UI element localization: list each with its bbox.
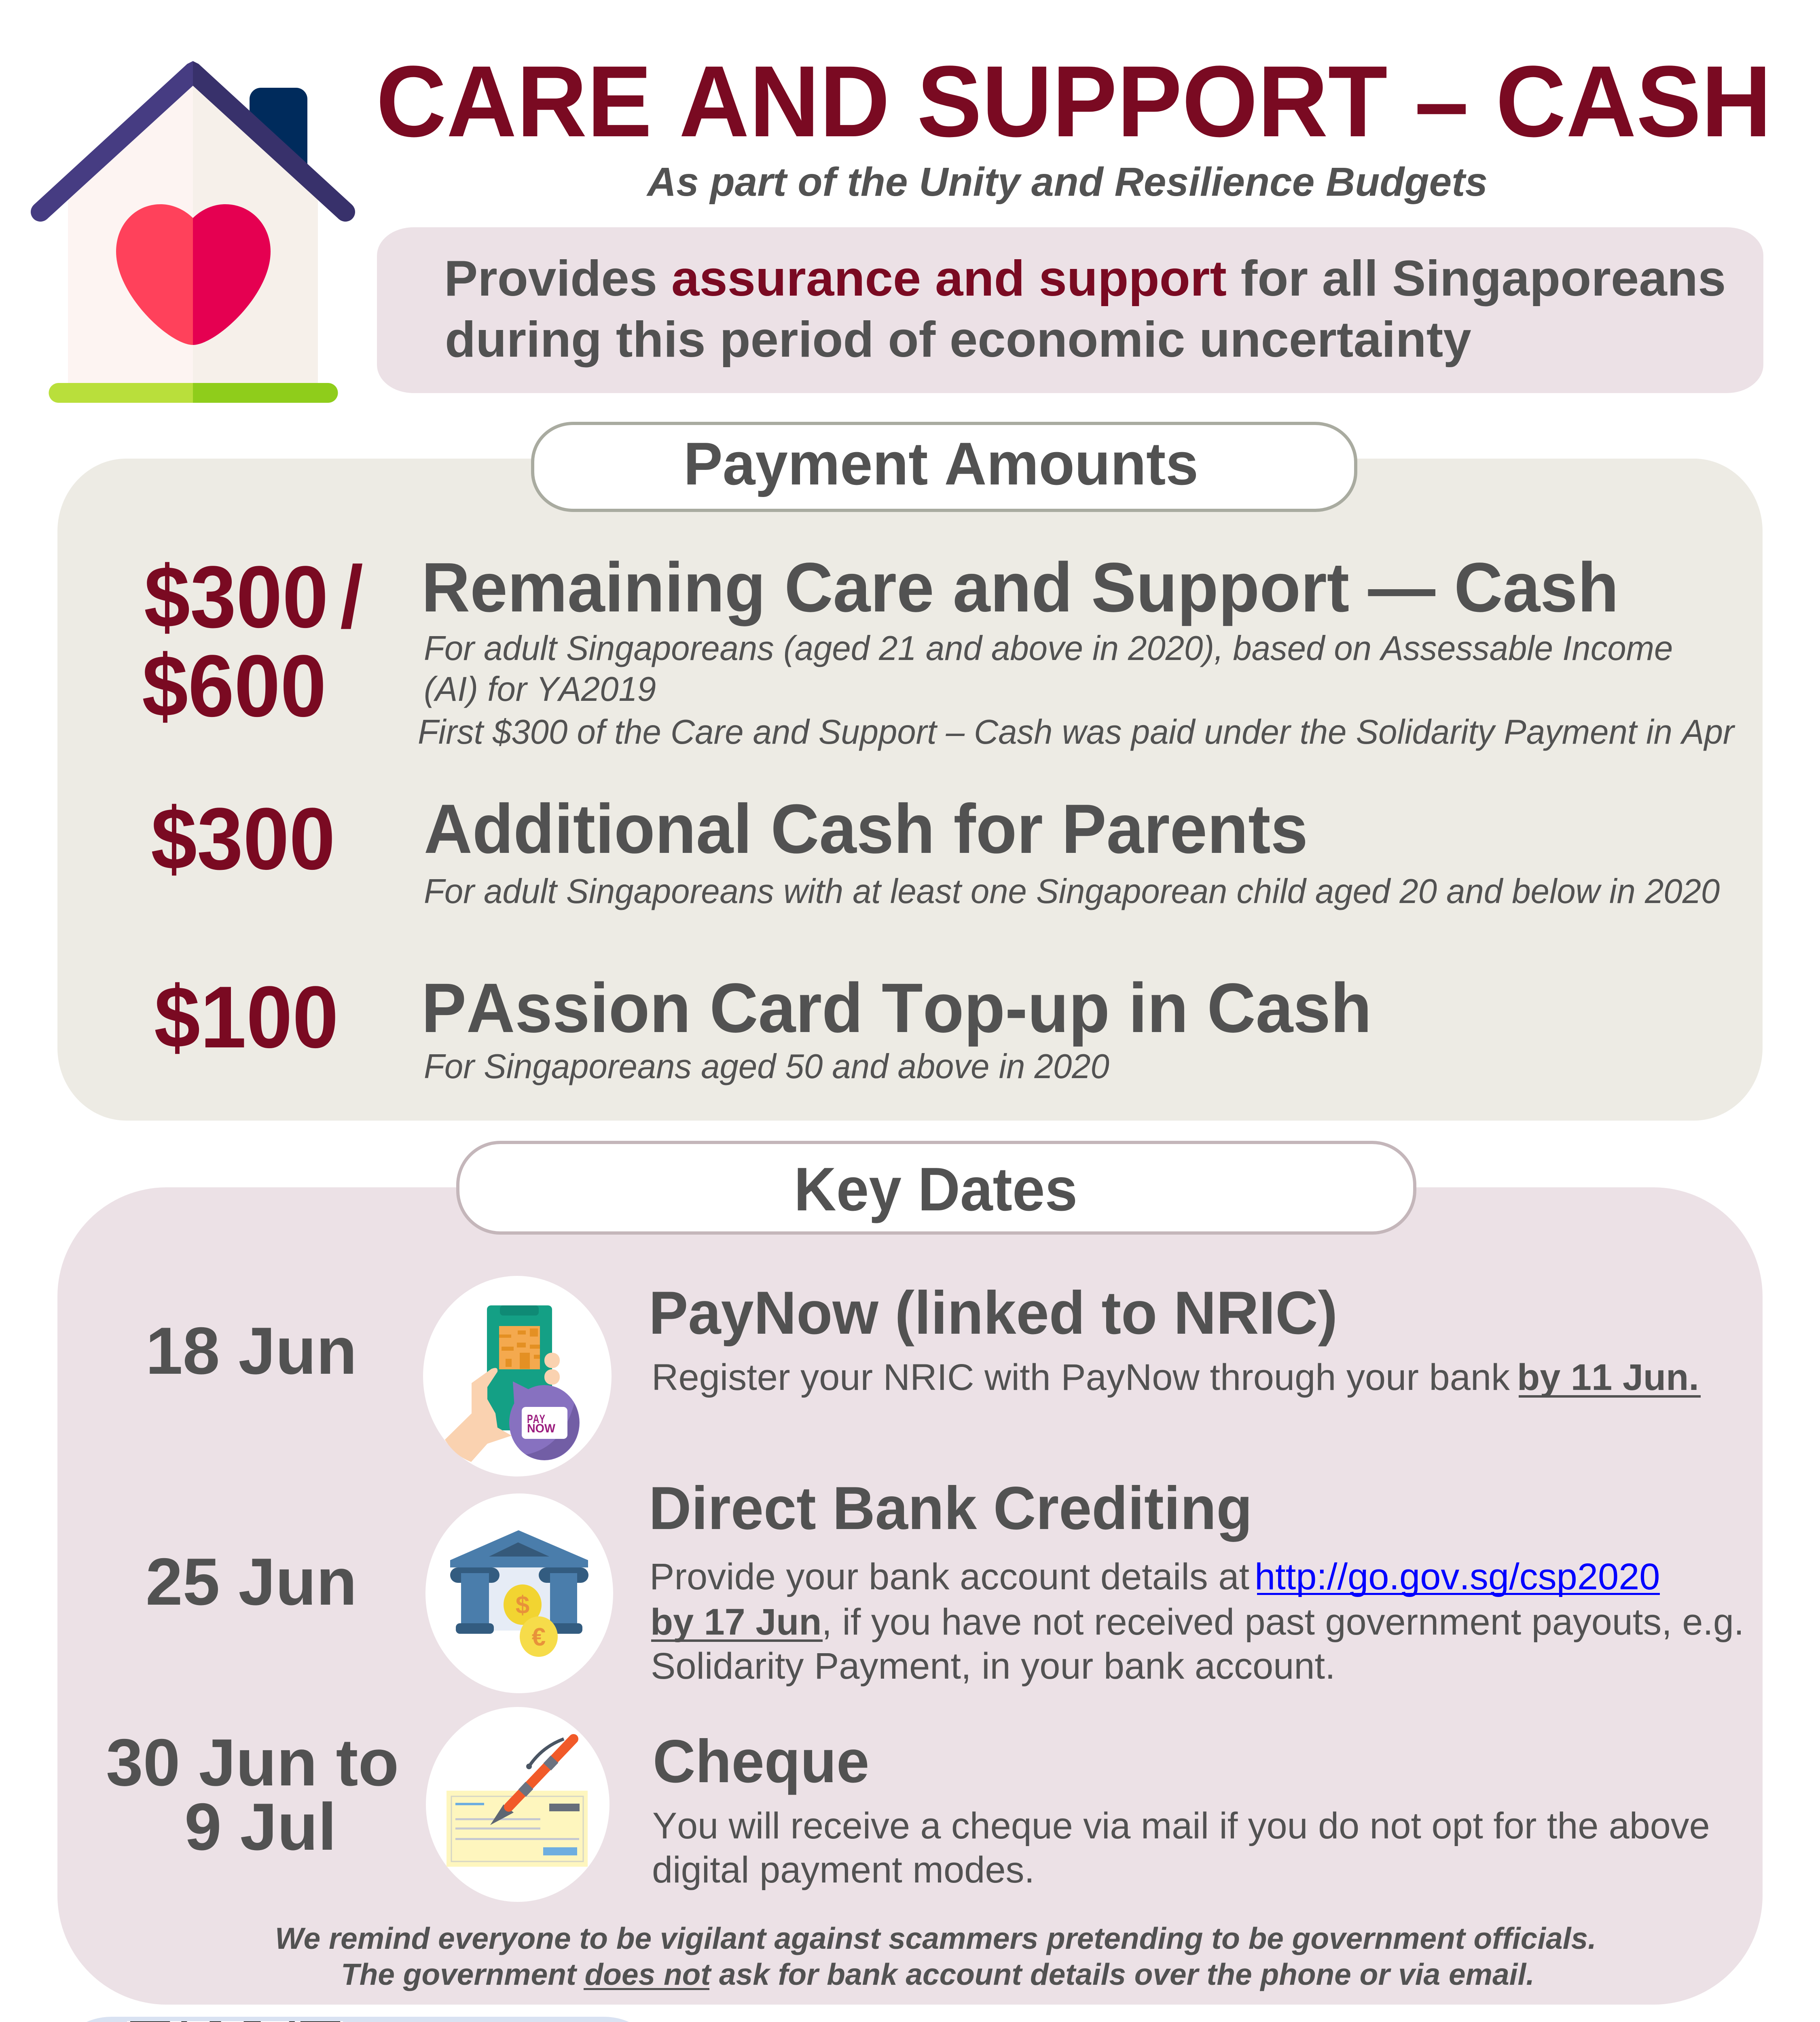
text: direct bank crediting: Solidarity Payment, in your bank account.	[651, 1646, 1335, 1687]
payment amount row 1	[142, 548, 1735, 751]
text: direct bank crediting: Direct Bank Crediting	[649, 1474, 1253, 1542]
date: 30 Jun to 9 Jul	[106, 1725, 399, 1864]
heading pill: key dates: Key Dates	[794, 1155, 1077, 1224]
payment amount row 1: /	[340, 548, 363, 646]
icon: bank: €	[532, 1623, 546, 1651]
payment amount row 2: For adult Singaporeans with at least one Singaporean child aged 20 and below in 2020	[424, 871, 1720, 910]
panel: intro statement: during this period of economic uncertainty	[445, 311, 1471, 368]
text: cheque: digital payment modes.	[652, 1849, 1035, 1891]
panel: intro statement: Provides assurance and support for all Singaporeans	[444, 250, 1726, 307]
payment amount row 3: For Singaporeans aged 50 and above in 2020	[424, 1047, 1109, 1085]
callout: scam warning: We remind everyone to be vigilant against scammers pretending to be government officials.	[275, 1921, 1596, 1955]
payment amount row 1: First $300 of the Care and Support – Cash was paid under the Solidarity Payment in Apr	[418, 712, 1735, 751]
icon: cheque and pen	[426, 1707, 609, 1902]
text: PayNow	[649, 1279, 1701, 1398]
payment amount row 2	[151, 790, 1720, 910]
icon: bank	[425, 1493, 613, 1693]
payment amount row 1: For adult Singaporeans (aged 21 and above in 2020), based on Assessable Income	[424, 628, 1673, 667]
text: cheque: You will receive a cheque via mail if you do not opt for the above	[652, 1805, 1710, 1846]
date: 18 Jun: 18 Jun	[146, 1313, 357, 1388]
text: cheque	[652, 1728, 1710, 1891]
date: 30 Jun to 9 Jul: 30 Jun to	[106, 1725, 399, 1800]
panel: payment amounts	[57, 459, 1763, 1121]
panel: scan for more info	[63, 2017, 652, 2022]
text: PayNow: PayNow (linked to NRIC)	[649, 1279, 1337, 1347]
text: direct bank crediting	[649, 1474, 1744, 1687]
heading pill: payment amounts: Payment Amounts	[684, 430, 1198, 497]
icon: PayNow phone	[423, 1276, 612, 1476]
text: direct bank crediting: http://go.gov.sg/csp2020	[1255, 1556, 1660, 1597]
text: PayNow: by 11 Jun.	[1517, 1357, 1699, 1398]
payment amount row 3: PAssion Card Top-up in Cash	[421, 969, 1372, 1047]
text: PayNow: Register your NRIC with PayNow through your bank	[652, 1357, 1510, 1398]
payment amount row 1: Remaining Care and Support — Cash	[421, 548, 1619, 626]
date: 30 Jun to 9 Jul: 9 Jul	[184, 1789, 336, 1864]
payment amount row 1: $600	[142, 637, 326, 735]
payment amount row 3: $100	[154, 968, 339, 1066]
payment amount row 1: (AI) for YA2019	[424, 669, 656, 708]
date: 25 Jun: 25 Jun	[146, 1544, 357, 1619]
icon: bank: $	[516, 1591, 529, 1619]
text: direct bank crediting: by 17 Jun, if you have not received past government payouts, e.g.	[650, 1601, 1744, 1643]
text: cheque: Cheque	[653, 1728, 869, 1795]
payment amount row 2: $300	[151, 790, 335, 888]
panel: intro statement	[377, 227, 1763, 393]
icon: house with heart	[31, 61, 355, 403]
heading pill: payment amounts	[533, 423, 1356, 510]
heading pill: key dates	[458, 1142, 1415, 1233]
callout: scam warning: The government does not ask for bank account details over the phone or via email.	[341, 1957, 1534, 1991]
icon: PayNow phone: NOW	[527, 1422, 556, 1435]
payment amount row 3	[154, 968, 1372, 1085]
callout: scam warning	[275, 1921, 1596, 1991]
payment amount row 2: Additional Cash for Parents	[424, 790, 1308, 868]
icon: PayNow phone: PAY	[527, 1413, 545, 1426]
text: direct bank crediting: Provide your bank account details at	[650, 1556, 1249, 1597]
panel: key dates	[57, 1187, 1763, 2005]
QR code	[127, 2021, 343, 2022]
subtitle: As part of the Unity and Resilience Budgets	[646, 159, 1488, 205]
payment amount row 1: $300	[144, 548, 328, 646]
title: CARE AND SUPPORT – CASH	[376, 45, 1771, 158]
